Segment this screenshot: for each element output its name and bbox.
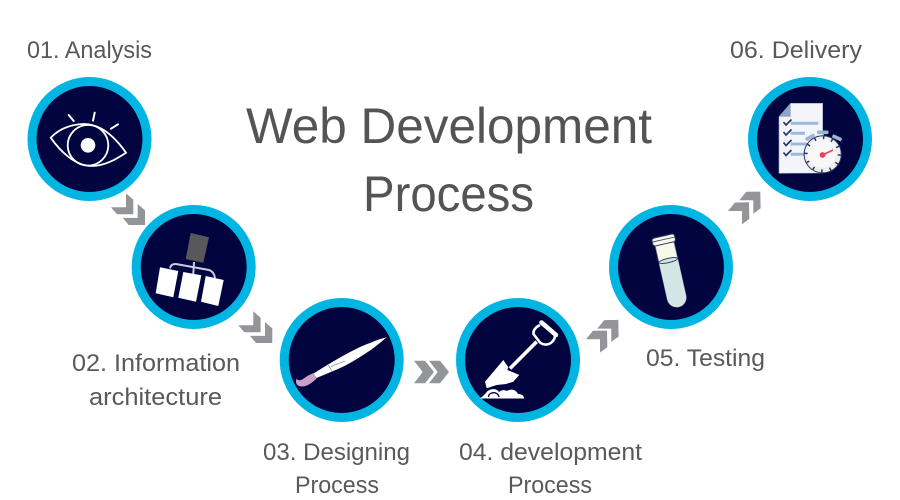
step 4 label: 04. development <box>459 439 642 466</box>
step 3 label <box>263 439 410 499</box>
arrow: step 1 to 2 <box>111 193 145 225</box>
step 4 label: Process <box>508 472 592 499</box>
title: Process <box>363 166 534 222</box>
step 3 label: 03. Designing <box>263 439 410 466</box>
step 5 label: 05. Testing <box>646 345 765 372</box>
step 6 label: 06. Delivery <box>730 37 862 64</box>
step 2 label: 02. Information <box>72 350 240 377</box>
step 1 circle: eye icon <box>32 82 147 196</box>
step 2 label: architecture <box>89 384 222 411</box>
step 2 label <box>72 350 240 411</box>
arrow: step 4 to 5 <box>586 320 619 353</box>
title <box>246 98 652 222</box>
step 3 label: Process <box>295 472 379 499</box>
step 2 circle: hierarchy icon <box>136 210 251 324</box>
step 4 label <box>459 439 642 499</box>
step 6 circle: checklist and stopwatch icon <box>752 82 868 196</box>
step 1 label: 01. Analysis <box>27 37 152 64</box>
title: Web Development <box>246 98 652 154</box>
step 5 circle: test tube icon <box>614 210 728 324</box>
step 4 circle: shovel icon <box>460 302 576 418</box>
arrow: step 2 to 3 <box>238 311 272 343</box>
arrow: step 3 to 4 <box>414 361 449 383</box>
arrow: step 5 to 6 <box>728 192 761 224</box>
step 3 circle: paintbrush icon <box>284 302 399 418</box>
